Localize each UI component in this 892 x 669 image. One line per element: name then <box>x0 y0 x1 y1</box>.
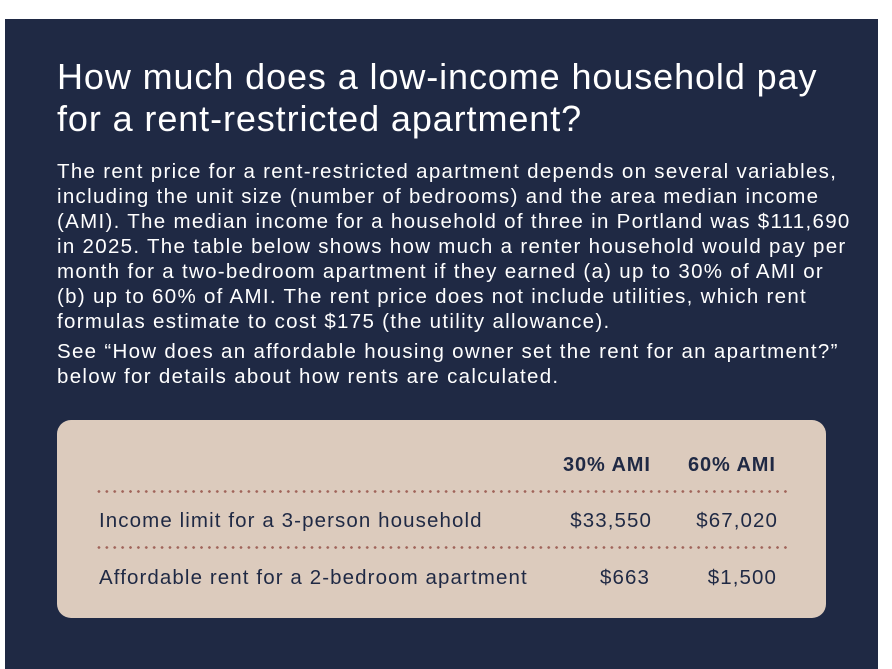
header: 60% AMI: 60% AMI <box>688 454 776 476</box>
text block: see also <box>57 340 839 388</box>
text block: intro: (AMI). The median income for a household of three in Portland was $111,690 <box>57 210 851 233</box>
header: 30% AMI: 30% AMI <box>563 454 651 476</box>
text block: intro: in 2025. The table below shows how much a renter household would pay per <box>57 235 847 258</box>
row: rent label: Affordable rent for a 2-bedroom apartment <box>99 566 528 589</box>
text block: intro: (b) up to 60% of AMI. The rent price does not include utilities, which rent <box>57 285 807 308</box>
row: rent 60: $1,500 <box>708 566 777 589</box>
text block: intro: including the unit size (number of bedrooms) and the area median income <box>57 185 819 208</box>
title <box>57 56 817 139</box>
text block: intro: The rent price for a rent-restricted apartment depends on several variables, <box>57 160 837 183</box>
text block: see also: below for details about how rents are calculated. <box>57 365 559 388</box>
title: How much does a low-income household pay <box>57 56 817 97</box>
text block: see also: See “How does an affordable housing owner set the rent for an apartment?” <box>57 340 839 363</box>
row: income 60: $67,020 <box>696 509 778 532</box>
text block: intro: month for a two-bedroom apartment if they earned (a) up to 30% of AMI or <box>57 260 824 283</box>
text block: intro: formulas estimate to cost $175 (the utility allowance). <box>57 310 610 333</box>
row: rent 30: $663 <box>600 566 650 589</box>
row: income limit label: Income limit for a 3-person household <box>99 509 483 532</box>
table <box>57 420 826 618</box>
text block: intro <box>57 160 851 333</box>
row: income 30: $33,550 <box>570 509 652 532</box>
title: for a rent-restricted apartment? <box>57 98 582 139</box>
